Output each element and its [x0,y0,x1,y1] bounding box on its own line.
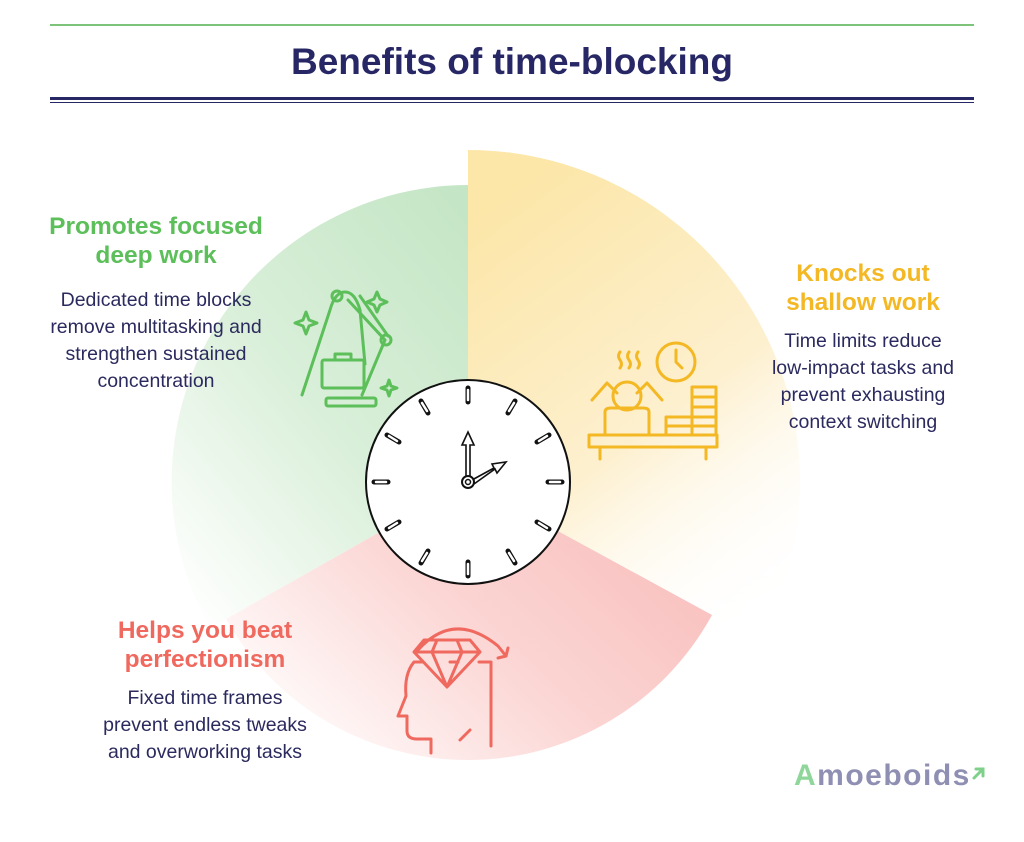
sector: pink [226,482,712,760]
heading: perfectionism: perfectionism [125,646,285,673]
clock [366,380,570,584]
heading: focused deep work: Promotes focused [49,213,263,240]
body: perfectionism: and overworking tasks [108,741,302,763]
body: shallow work: context switching [789,411,937,433]
panel text: shallow work [772,260,954,433]
icon: stressed worker [589,343,717,459]
body: perfectionism: Fixed time frames [128,687,282,709]
heading: shallow work [786,260,940,316]
heading: focused deep work: deep work [95,242,217,269]
body: shallow work: Time limits reduce [784,330,942,352]
heading: perfectionism [118,617,292,673]
heading: perfectionism: Helps you beat [118,617,292,644]
panel text: perfectionism [103,617,307,763]
sector: green [172,185,468,628]
body: shallow work: low-impact tasks and [772,357,954,379]
sector: yellow [468,150,800,641]
heading: shallow work: shallow work [786,289,940,316]
body: focused deep work: remove multitasking and [50,316,262,338]
panel text: focused deep work [49,213,263,392]
logo mark: green arrow [974,769,983,778]
heading: focused deep work [49,213,263,269]
logo: Amoeboids [794,759,971,792]
icon: desk lamp [295,291,397,406]
body: perfectionism: prevent endless tweaks [103,714,307,736]
body: focused deep work [50,289,262,392]
body: shallow work [772,330,954,433]
body: perfectionism [103,687,307,763]
title underline [50,97,974,103]
body: focused deep work: Dedicated time blocks [61,289,251,311]
title: Benefits of time-blocking [291,41,733,82]
top green line [50,24,974,26]
body: shallow work: prevent exhausting [781,384,945,406]
body: focused deep work: concentration [97,370,215,392]
icon: head with diamond [398,629,508,753]
heading: shallow work: Knocks out [796,260,930,287]
body: focused deep work: strengthen sustained [65,343,247,365]
